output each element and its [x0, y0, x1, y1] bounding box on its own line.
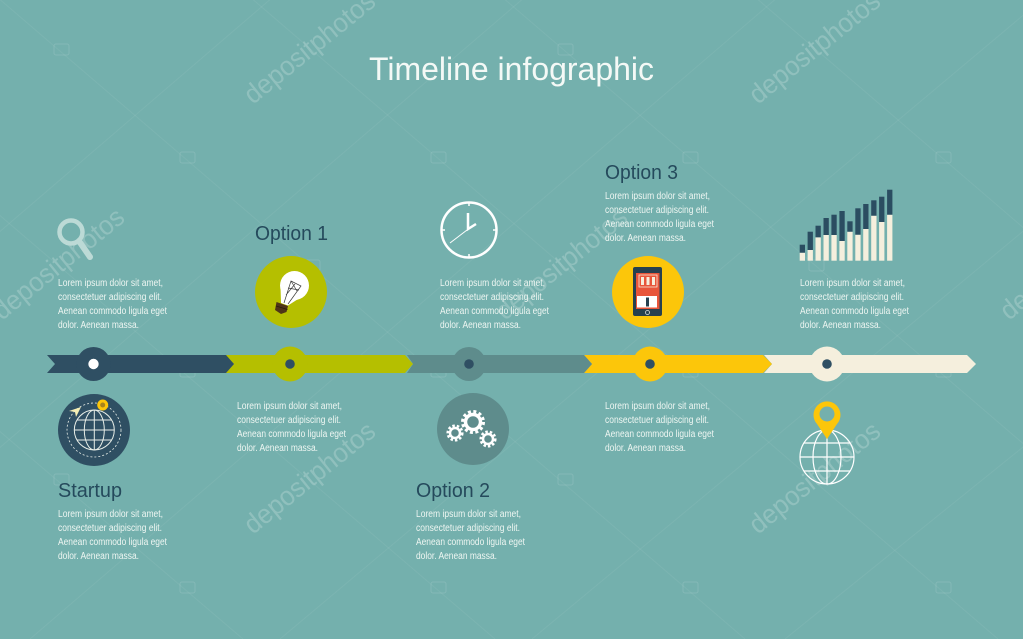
icon: gears	[437, 393, 509, 465]
text block: first top: Lorem ipsum dolor sit amet,	[58, 278, 163, 289]
text block: option 1: Aenean commodo ligula eget	[237, 429, 346, 440]
text block: clock	[440, 278, 549, 331]
heading: Startup: Startup	[58, 480, 122, 502]
text block: chart: Lorem ipsum dolor sit amet,	[800, 278, 905, 289]
text block: option 3 top: dolor. Aenean massa.	[605, 233, 686, 244]
icon: light bulb	[255, 256, 327, 328]
text block: chart: consectetuer adipiscing elit.	[800, 292, 904, 303]
text block: option 3 top: Lorem ipsum dolor sit amet,	[605, 191, 710, 202]
text block: option 1: dolor. Aenean massa.	[237, 443, 318, 454]
text block: first top: consectetuer adipiscing elit.	[58, 292, 162, 303]
segment: yellow	[584, 346, 772, 382]
text block: startup: Aenean commodo ligula eget	[58, 537, 167, 548]
segment: navy	[47, 347, 234, 381]
watermarks: depositphotos	[490, 202, 633, 326]
icon: clock	[441, 202, 497, 258]
bar chart	[800, 190, 892, 261]
icon: phone	[612, 256, 684, 328]
text block: option 2: Lorem ipsum dolor sit amet,	[416, 509, 521, 520]
watermarks: depositphotos	[238, 416, 381, 540]
segment: cream	[764, 346, 976, 382]
text block: clock: consectetuer adipiscing elit.	[440, 292, 544, 303]
text block: startup: dolor. Aenean massa.	[58, 551, 139, 562]
text block: option 2: Aenean commodo ligula eget	[416, 537, 525, 548]
text block: clock: Aenean commodo ligula eget	[440, 306, 549, 317]
text block: startup: consectetuer adipiscing elit.	[58, 523, 162, 534]
text block: option 3 bottom: dolor. Aenean massa.	[605, 443, 686, 454]
text block: chart: Aenean commodo ligula eget	[800, 306, 909, 317]
text block: option 2	[416, 509, 525, 562]
text block: clock: Lorem ipsum dolor sit amet,	[440, 278, 545, 289]
text block: option 2: dolor. Aenean massa.	[416, 551, 497, 562]
text block: option 3 bottom: consectetuer adipiscing elit.	[605, 415, 709, 426]
text block: first top	[58, 278, 167, 331]
text block: option 3 top: Aenean commodo ligula eget	[605, 219, 714, 230]
title: Timeline infographic	[369, 51, 654, 87]
icon: magnifier	[60, 220, 90, 257]
text block: option 3 bottom: Lorem ipsum dolor sit amet,	[605, 401, 710, 412]
text block: option 1	[237, 401, 346, 454]
text block: first top: dolor. Aenean massa.	[58, 320, 139, 331]
segment: slate	[407, 347, 592, 381]
heading: Option 3: Option 3	[605, 162, 678, 184]
text block: chart: dolor. Aenean massa.	[800, 320, 881, 331]
text block: first top: Aenean commodo ligula eget	[58, 306, 167, 317]
text block: option 2: consectetuer adipiscing elit.	[416, 523, 520, 534]
text block: option 1: consectetuer adipiscing elit.	[237, 415, 341, 426]
text block: option 3 top	[605, 191, 714, 244]
text block: startup	[58, 509, 167, 562]
icon: globe with location pin	[800, 401, 854, 484]
segment: green	[225, 346, 413, 382]
text block: option 3 bottom: Aenean commodo ligula eget	[605, 429, 714, 440]
icon: globe with plane	[58, 394, 130, 466]
text block: clock: dolor. Aenean massa.	[440, 320, 521, 331]
text block: option 3 top: consectetuer adipiscing elit.	[605, 205, 709, 216]
watermarks: depositphotos	[743, 416, 886, 540]
heading: Option 2: Option 2	[416, 480, 490, 502]
text block: option 3 bottom	[605, 401, 714, 454]
timeline arrow	[47, 346, 976, 382]
text block: startup: Lorem ipsum dolor sit amet,	[58, 509, 163, 520]
text block: chart	[800, 278, 909, 331]
heading: Option 1: Option 1	[255, 223, 328, 245]
text block: option 1: Lorem ipsum dolor sit amet,	[237, 401, 342, 412]
